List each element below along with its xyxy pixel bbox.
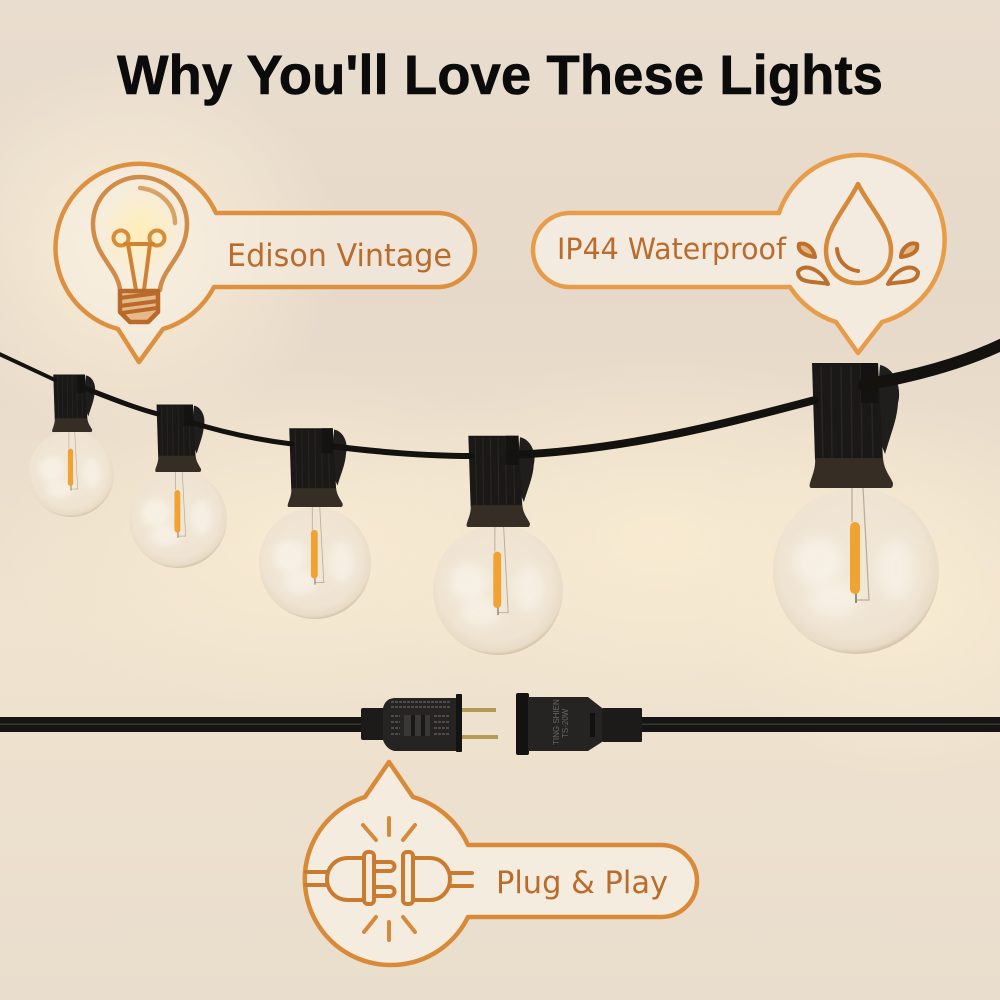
icon: plug and socket with sparks: [306, 818, 472, 940]
bulb 1: [28, 374, 114, 517]
callout outline: [305, 762, 697, 965]
icon: light bulb: [93, 177, 187, 322]
bulb 4: [433, 436, 563, 655]
label: Plug & Play: Plug & Play: [496, 865, 668, 901]
bulb 3: [259, 428, 371, 619]
callout: Plug & Play: [305, 762, 697, 965]
title: Why You'll Love These Lights: [117, 43, 883, 106]
callout outline: [533, 155, 945, 353]
plug markings: TING SHIEN: [552, 699, 561, 745]
callout: Edison Vintage: [56, 164, 475, 362]
string light cord: [0, 343, 1000, 456]
callout: IP44 Waterproof: [533, 155, 945, 353]
label: IP44 Waterproof: IP44 Waterproof: [557, 232, 787, 266]
bulb 2: [129, 404, 227, 568]
male plug and cord: [0, 694, 498, 752]
plug markings: [552, 699, 570, 745]
bulb 5: [773, 363, 939, 654]
callout outline: [56, 164, 475, 362]
female plug and cord: [516, 693, 1000, 755]
icon: water drop with splashes: [798, 184, 918, 284]
label: Edison Vintage: Edison Vintage: [227, 238, 452, 274]
plug markings: TS-20W: [561, 708, 570, 738]
